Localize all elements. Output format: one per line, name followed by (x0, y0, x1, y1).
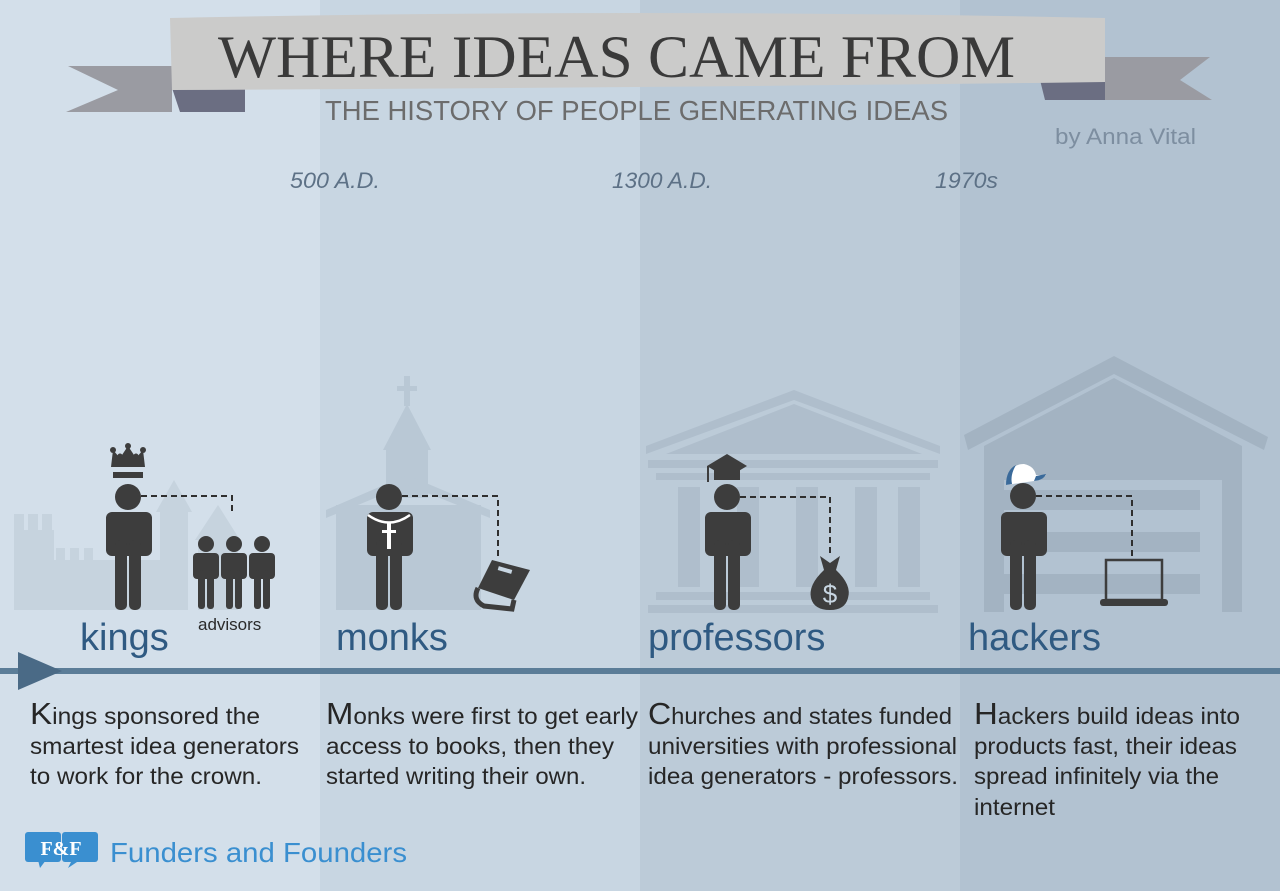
background: church (326, 376, 490, 610)
labels: monks (336, 617, 448, 659)
logo: F&F (40, 838, 82, 860)
labels (80, 617, 1101, 659)
labels: hackers (968, 617, 1101, 659)
logo: Funders and Founders (110, 837, 407, 868)
icon: monk (367, 484, 413, 610)
descriptions: universities with professional (648, 733, 957, 759)
dates: 1300 A.D. (612, 168, 712, 193)
background: castle (14, 480, 240, 610)
connectors (141, 496, 1132, 560)
timeline arrow (0, 652, 1280, 690)
advisors label: advisors (198, 615, 261, 634)
descriptions: products fast, their ideas (974, 733, 1237, 759)
descriptions: spread infinitely via the (974, 763, 1219, 789)
icon: money bag (811, 556, 849, 610)
descriptions: Kings sponsored the (30, 696, 260, 731)
descriptions: Churches and states funded (648, 696, 952, 731)
descriptions: access to books, then they (326, 733, 615, 759)
icon: advisors (193, 536, 275, 609)
background: temple (646, 390, 940, 613)
title banner (66, 13, 1212, 112)
logo (25, 832, 407, 868)
labels: professors (648, 617, 825, 659)
descriptions: started writing their own. (326, 763, 586, 789)
background: garage (964, 356, 1268, 612)
author: by Anna Vital (1055, 124, 1196, 149)
title: WHERE IDEAS CAME FROM (218, 24, 1015, 90)
dates: 500 A.D. (290, 168, 380, 193)
dates: 1970s (935, 168, 998, 193)
icon: hacker (1001, 464, 1047, 610)
icon: money bag: $ (823, 579, 838, 609)
icon: king with crown (106, 443, 152, 610)
descriptions (30, 696, 1240, 820)
descriptions: smartest idea generators (30, 733, 299, 759)
descriptions: Monks were first to get early (326, 696, 639, 731)
labels: kings (80, 617, 169, 659)
dates (290, 168, 998, 193)
icon: professor (705, 454, 751, 610)
icon: laptop (1100, 560, 1168, 606)
icon: book (476, 560, 530, 609)
descriptions: internet (974, 794, 1056, 820)
descriptions: idea generators - professors. (648, 763, 958, 789)
descriptions: Hackers build ideas into (974, 696, 1240, 731)
descriptions: to work for the crown. (30, 763, 262, 789)
subtitle: THE HISTORY OF PEOPLE GENERATING IDEAS (325, 95, 948, 126)
